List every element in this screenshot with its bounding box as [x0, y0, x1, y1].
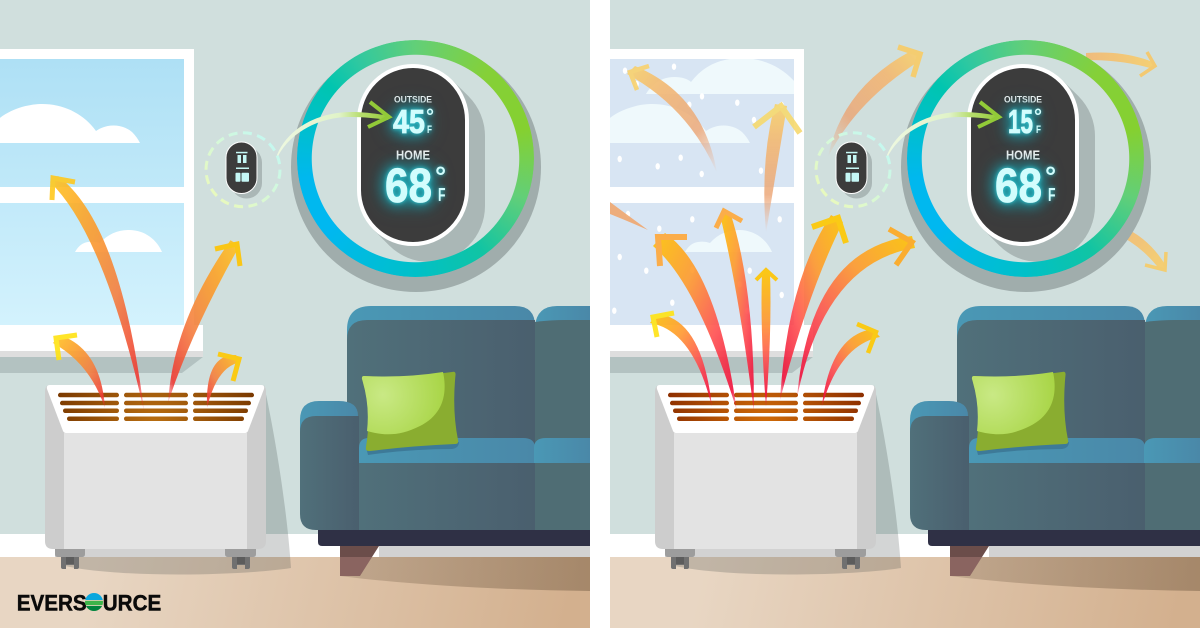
- unit: large F: F: [438, 185, 446, 205]
- arrow: escaping top centre: [828, 47, 921, 157]
- heat arrows escaping: [610, 47, 1166, 412]
- unit: degree: °: [426, 106, 434, 128]
- arrow: escaping right bottom: [1115, 225, 1166, 270]
- gradient ring: [297, 40, 534, 277]
- thermostat display: outside 15, home 68: [901, 40, 1151, 292]
- arrow: short left: [53, 335, 105, 408]
- arrow: escaping right top: [1086, 52, 1155, 76]
- logo mark: [85, 593, 103, 611]
- arrow: short right: [207, 354, 241, 408]
- pillow: [362, 372, 459, 455]
- arrow: strong centre: [756, 270, 777, 407]
- unit: large F: F: [1048, 185, 1056, 205]
- panel: cold day: [605, 0, 1200, 628]
- label: outside: OUTSIDE: [394, 94, 432, 106]
- heater with shadow: [655, 385, 901, 574]
- reading: 68: 68: [385, 160, 432, 213]
- arrow: strong big right: [797, 229, 915, 398]
- arrow: escaping left edge: [610, 202, 648, 230]
- wall control: [816, 133, 890, 207]
- reading: 68: 68: [995, 160, 1042, 213]
- sofa: [910, 306, 1200, 591]
- arrow: strong short left: [650, 313, 712, 407]
- reading: 45: 45: [393, 103, 425, 140]
- window: sunny sky: [0, 49, 203, 373]
- arrow: control to outside reading: [277, 102, 390, 156]
- wall: [0, 0, 590, 534]
- arrow: strong centre right: [780, 215, 846, 400]
- arrow: strong short right: [822, 324, 880, 407]
- unit: F: F: [427, 124, 432, 136]
- pillow: [972, 372, 1069, 455]
- arrow: strong centre left: [716, 211, 754, 412]
- unit: F: F: [1036, 124, 1041, 136]
- arrow: strong big left: [653, 233, 737, 410]
- label: home: HOME: [1006, 148, 1040, 162]
- unit: large degree: °: [435, 161, 446, 192]
- unit: degree: °: [1034, 106, 1042, 128]
- label: outside: OUTSIDE: [1004, 94, 1042, 106]
- sofa: [300, 306, 590, 591]
- thermostat display: outside 45, home 68: [291, 40, 541, 292]
- floor: [0, 557, 590, 628]
- heater with shadow: [45, 385, 291, 574]
- arrow: tall right: [168, 240, 240, 403]
- logo: Eversource: EVERSOURCE: [17, 590, 161, 616]
- gradient ring: [907, 40, 1144, 277]
- wall control: [206, 133, 280, 207]
- wall: [610, 0, 1200, 534]
- panel: mild day: [0, 0, 590, 628]
- window: snowy sky: [605, 49, 813, 373]
- label: home: HOME: [396, 148, 430, 162]
- logo: Eversource: [18, 593, 161, 611]
- baseboard: [610, 534, 1200, 557]
- arrow: escaping top left: [627, 66, 717, 173]
- arrow: tall left: [50, 176, 144, 411]
- arrow: control to outside reading: [887, 102, 1000, 156]
- baseboard: [0, 534, 590, 557]
- unit: large degree: °: [1045, 161, 1056, 192]
- floor: [610, 557, 1200, 628]
- arrow: escaping upward: [754, 104, 800, 233]
- reading: 15: 15: [1008, 103, 1033, 140]
- heat arrows: [50, 176, 241, 411]
- snowflakes: [612, 63, 784, 314]
